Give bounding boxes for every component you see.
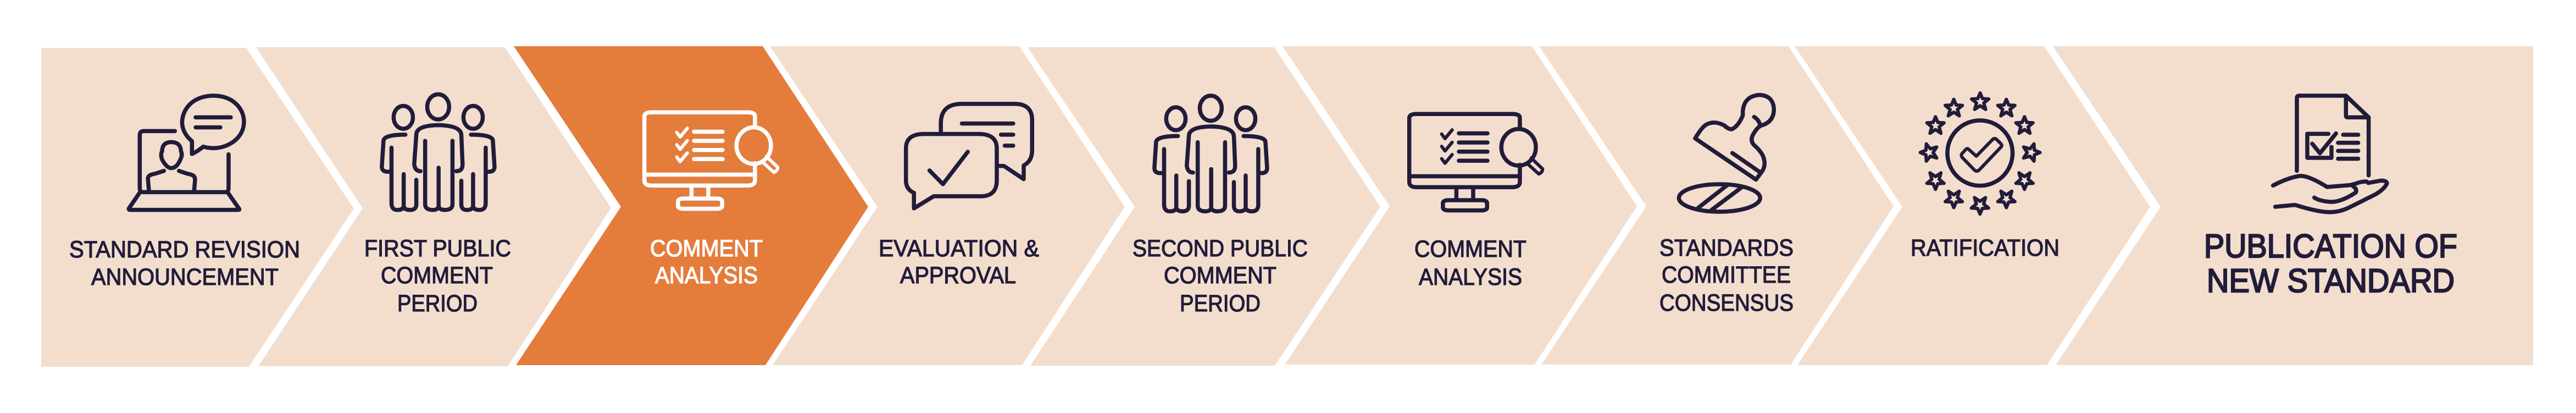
label: second public comment period: PERIOD [1180, 290, 1261, 317]
label: second public comment period [1132, 235, 1308, 317]
panel: publication of new standard [2053, 46, 2533, 365]
panel: standards committee consensus [1539, 46, 1894, 365]
label: first public comment period: FIRST PUBLIC [364, 235, 511, 262]
icon: document held on open hand [2273, 96, 2387, 212]
label: first public comment period [364, 235, 511, 317]
chevron 8 [1795, 46, 2150, 365]
panel: comment analysis (highlighted) [514, 46, 868, 365]
label: publication of new standard: PUBLICATION OF [2204, 228, 2457, 265]
label: comment analysis: ANALYSIS [655, 262, 758, 289]
panel: comment analysis [1283, 46, 1637, 365]
label: evaluation and approval: APPROVAL [900, 262, 1016, 289]
icon: monitor checklist with magnifier, white [645, 112, 778, 209]
chevron 5 [1028, 47, 1380, 366]
label: first public comment period: PERIOD [397, 290, 478, 317]
label: ratification: RATIFICATION [1911, 235, 2059, 261]
label: standards committee consensus: CONSENSUS [1659, 290, 1794, 316]
icon: laptop presenter with speech bubble [129, 96, 244, 210]
label: evaluation and approval: EVALUATION & [879, 235, 1039, 262]
icon: group of people [1154, 96, 1267, 211]
label: comment analysis: ANALYSIS [1419, 264, 1522, 290]
chevron 1 [41, 48, 354, 367]
chevron 2 [256, 47, 611, 366]
chevron 4 [770, 46, 1125, 365]
chevron 9 final [2053, 46, 2533, 365]
label: standards committee consensus [1659, 235, 1794, 316]
chevron 7 [1539, 46, 1894, 365]
label: evaluation and approval [879, 235, 1039, 289]
label: publication of new standard: NEW STANDARD [2207, 262, 2455, 299]
icon: monitor checklist with magnifier [1409, 114, 1542, 211]
icon: rubber stamp [1679, 95, 1774, 212]
label: standards committee consensus: STANDARDS [1659, 235, 1794, 261]
label: standard revision announcement: ANNOUNCEMENT [91, 264, 279, 290]
panel: first public comment period [256, 47, 611, 366]
label: comment analysis [1414, 236, 1526, 290]
label: standard revision announcement [69, 236, 300, 290]
chevron 3 orange [514, 46, 868, 365]
label: second public comment period: COMMENT [1164, 262, 1276, 289]
label: comment analysis [650, 235, 763, 289]
label: second public comment period: SECOND PUBLIC [1132, 235, 1308, 262]
panel: standard revision announcement [41, 48, 354, 367]
icon: overlapping speech bubbles with check [906, 104, 1032, 208]
label: comment analysis: COMMENT [1414, 236, 1526, 262]
panel: ratification [1795, 46, 2150, 365]
panel: evaluation and approval [770, 46, 1125, 365]
label: publication of new standard [2204, 228, 2457, 299]
label: standards committee consensus: COMMITTEE [1662, 262, 1791, 288]
icon: group of people [382, 95, 495, 210]
label: comment analysis: COMMENT [650, 235, 763, 262]
icon: check in ring of stars [1920, 93, 2040, 214]
chevron 6 [1283, 46, 1637, 365]
label: first public comment period: COMMENT [381, 262, 493, 289]
label: standard revision announcement: STANDARD REVISION [69, 236, 300, 263]
panel: second public comment period [1028, 47, 1380, 366]
